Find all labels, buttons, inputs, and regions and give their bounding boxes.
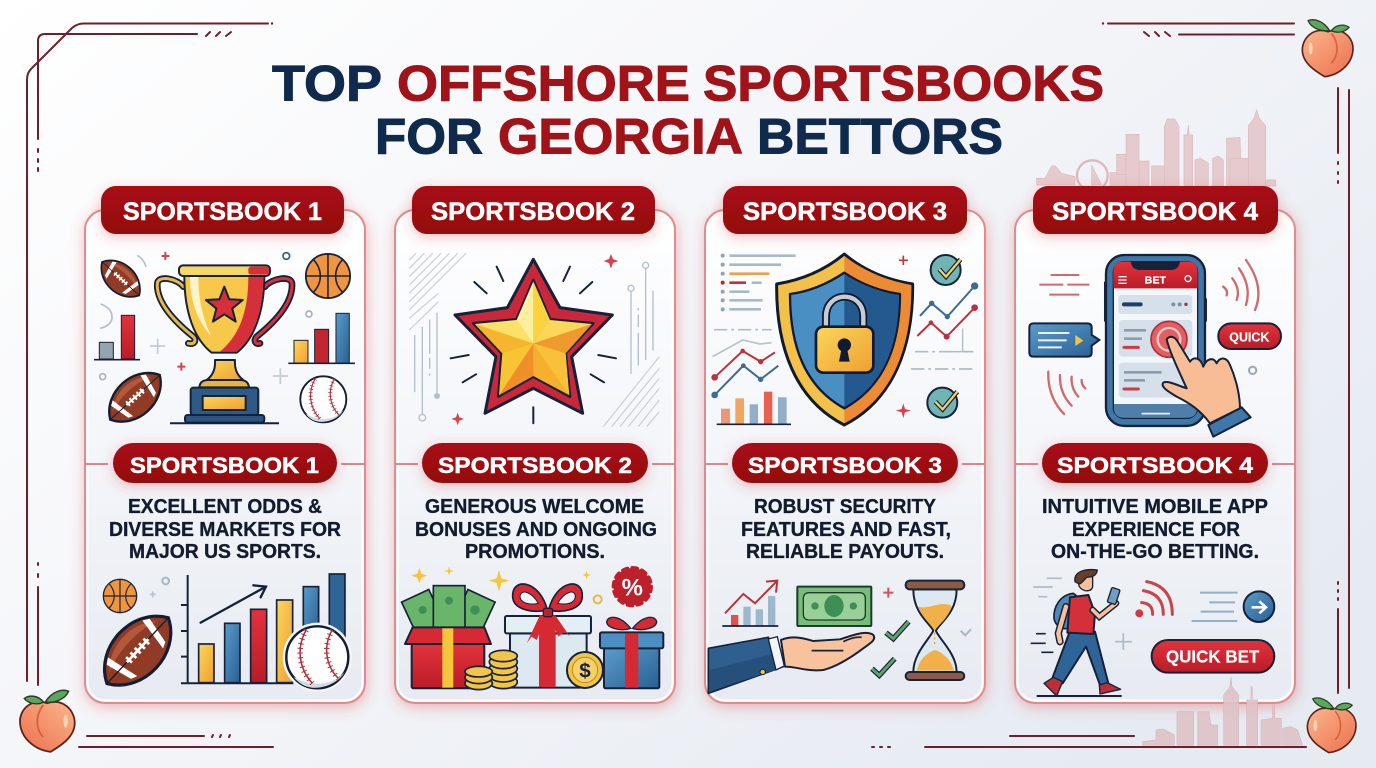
title: BETTORS (757, 108, 1003, 164)
icon: gold star with rays and tech lines (409, 253, 659, 427)
icon: betting phone with tapping hand: QUICK (1229, 330, 1270, 344)
divider with second pill (705, 443, 985, 483)
frame: top right lines (1102, 22, 1349, 693)
title (272, 56, 1104, 164)
title: TOP (272, 56, 382, 112)
description: INTUITIVE MOBILE APP (1042, 495, 1268, 518)
header pill (723, 186, 967, 234)
description: FEATURES AND FAST, (741, 518, 951, 541)
description (109, 495, 341, 563)
description (415, 495, 657, 563)
description: DIVERSE MARKETS FOR (109, 518, 341, 541)
header pill (412, 186, 655, 234)
description: PROMOTIONS. (465, 540, 605, 563)
divider with second pill: SPORTSBOOK 1 (130, 453, 319, 478)
icon: hand, cash and hourglass (708, 581, 971, 693)
title: FOR (375, 108, 483, 164)
description: EXPERIENCE FOR (1072, 518, 1240, 541)
description: MAJOR US SPORTS. (129, 540, 321, 563)
panel: sportsbook 2 (395, 186, 675, 703)
description: GENEROUS WELCOME (425, 495, 644, 518)
skyline: top right (1037, 110, 1276, 191)
header pill (1033, 186, 1278, 234)
icon: gift boxes, cash and coins: $ (579, 660, 591, 683)
icon: peach bottom right (1307, 698, 1356, 753)
icon: football, bar chart, baseball (88, 574, 352, 701)
icon: walking bettor, signal and quick bet button (1031, 570, 1274, 696)
header pill: SPORTSBOOK 3 (743, 198, 947, 226)
divider with second pill (395, 443, 675, 483)
card body (1015, 210, 1295, 703)
header pill: SPORTSBOOK 1 (123, 198, 322, 226)
description: BONUSES AND ONGOING (415, 518, 657, 541)
header pill (101, 186, 344, 234)
icon: gift boxes, cash and coins: % (622, 574, 643, 601)
divider with second pill: SPORTSBOOK 3 (748, 453, 942, 478)
title: SPORTSBOOKS (703, 56, 1104, 112)
header pill: SPORTSBOOK 2 (431, 198, 635, 226)
icon: betting phone with tapping hand: BET (1145, 275, 1166, 286)
description (741, 495, 951, 563)
divider with second pill (85, 443, 365, 483)
description (1042, 495, 1268, 563)
icon: trophy with sports balls and bars (93, 251, 355, 434)
description: ON-THE-GO BETTING. (1051, 540, 1259, 563)
panel: sportsbook 1 (85, 186, 365, 703)
title: GEORGIA (498, 108, 743, 164)
icon: walking bettor, signal and quick bet button: QUICK BET (1166, 647, 1260, 667)
frame: bottom right lines (872, 736, 1306, 747)
card body (395, 210, 675, 703)
panel: sportsbook 3 (705, 186, 985, 703)
divider with second pill: SPORTSBOOK 2 (438, 453, 632, 478)
description: EXCELLENT ODDS & (128, 495, 322, 518)
frame: top left corner lines (27, 22, 273, 685)
icon: gift boxes, cash and coins (402, 566, 663, 690)
description: ROBUST SECURITY (754, 495, 936, 518)
divider with second pill (1015, 443, 1295, 483)
title: OFFSHORE (397, 56, 690, 112)
icon: peach bottom left (20, 690, 75, 752)
skyline: bottom right (1143, 677, 1303, 745)
panel: sportsbook 4 (1015, 186, 1295, 703)
card body (705, 210, 985, 703)
header pill: SPORTSBOOK 4 (1052, 198, 1258, 226)
description: RELIABLE PAYOUTS. (746, 540, 944, 563)
card body (85, 210, 365, 703)
divider with second pill: SPORTSBOOK 4 (1057, 453, 1254, 478)
icon: security shield with padlock and charts (711, 254, 978, 425)
frame: bottom left lines (79, 735, 273, 747)
icon: peach top right (1302, 20, 1353, 77)
icon: betting phone with tapping hand (1029, 255, 1281, 437)
